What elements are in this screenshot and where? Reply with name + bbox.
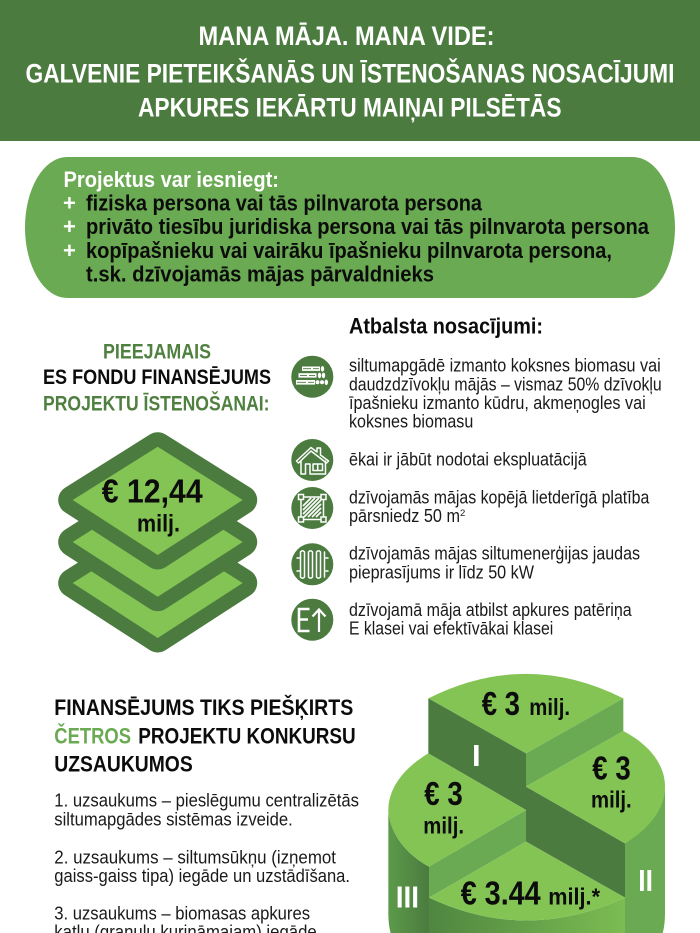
applicants list: t.sk. dzīvojamās mājas pārvaldnieks [86, 262, 434, 287]
amount labels: € 3 [424, 775, 463, 812]
total amount [102, 473, 203, 538]
text: list of calls: siltumapgādes sistēmas izveide. [54, 810, 293, 830]
slice I side faces [428, 698, 623, 810]
icon: floor area [291, 487, 333, 529]
text: list of calls [54, 791, 359, 933]
heading: available EU funding: PIEEJAMAIS [103, 341, 211, 364]
text: list of calls: 2. uzsaukums – siltumsūkņu (izņemot [54, 847, 336, 867]
text: energy class condition: dzīvojamā māja atbilst apkures patēriņa [349, 600, 633, 620]
applicants list: + [63, 238, 76, 263]
text: heating power condition [349, 544, 640, 582]
heading: four project calls: UZSAUKUMOS [54, 752, 193, 777]
applicants list: fiziska persona vai tās pilnvarota persona [86, 190, 483, 216]
title: MANA MĀJA. MANA VIDE: [198, 21, 494, 51]
chart: funding split cylinder [388, 674, 665, 933]
slice IV top [429, 842, 625, 920]
heading: four project calls: ČETROS [54, 723, 131, 748]
text: list of calls: 3. uzsaukums – biomasas apkures [54, 903, 310, 923]
text: floor area condition [349, 487, 650, 526]
slice III outer side [388, 810, 429, 933]
amount labels: milj.* [548, 883, 601, 909]
amount labels: milj. [529, 694, 570, 720]
text: heating power condition: dzīvojamās mājas siltumenerģijas jaudas [349, 544, 640, 564]
icon: stacked layers with total funding [73, 447, 243, 638]
applicants heading: Projektus var iesniegt: [64, 167, 279, 192]
slice II side [625, 787, 665, 933]
slice III inner side [429, 810, 526, 898]
text: biomass condition: koksnes biomasu [349, 412, 473, 432]
panel: who can apply [25, 157, 675, 298]
amount labels [423, 685, 632, 911]
heading: support conditions: Atbalsta nosacījumi: [349, 313, 543, 338]
text: list of calls: 1. uzsaukums – pieslēgumu centralizētās [54, 791, 359, 811]
slice III top [388, 753, 526, 867]
amount labels: € 3.44 [461, 874, 541, 911]
roman numerals: I [472, 738, 481, 773]
total amount: milj. [137, 511, 180, 538]
title [26, 21, 674, 123]
heading: four project calls: FINANSĒJUMS TIKS PIEŠĶIRTS [54, 695, 353, 720]
total amount: € 12,44 [102, 473, 203, 510]
text: floor area condition: 2 [460, 508, 465, 519]
slice IV side [429, 898, 625, 933]
heading: four project calls [54, 695, 356, 777]
amount labels: milj. [591, 786, 632, 812]
text: floor area condition: pārsniedz 50 m [349, 506, 460, 526]
slice II top [526, 731, 665, 843]
text: building commissioned: ēkai ir jābūt nodotai ekspluatācijā [349, 449, 588, 469]
applicants list: + [63, 214, 76, 239]
text: biomass condition [349, 356, 662, 432]
icon: house [291, 439, 333, 481]
text: floor area condition: dzīvojamās mājas kopējā lietderīgā platība [349, 487, 650, 507]
text: heating power condition: pieprasījums ir līdz 50 kW [349, 562, 534, 582]
text: biomass condition: īpašnieku izmanto kūdru, akmeņogles vai [349, 393, 646, 413]
applicants list: + [63, 190, 76, 216]
text: energy class condition [349, 600, 633, 638]
title: APKURES IEKĀRTU MAIŅAI PILSĒTĀS [138, 93, 562, 123]
roman numerals: II [638, 863, 653, 898]
applicants list [63, 190, 650, 287]
amount labels: milj. [423, 812, 464, 838]
text: energy class condition: E klasei vai efektīvākai klasei [349, 618, 553, 638]
amount labels: € 3 [592, 749, 631, 786]
roman numerals [396, 738, 653, 915]
text: biomass condition: siltumapgādē izmanto koksnes biomasu vai [349, 356, 661, 376]
amount labels: € 3 [482, 685, 520, 722]
slice I top [428, 674, 623, 753]
icon: energy class E with arrow [291, 599, 333, 641]
icon: wood logs [291, 356, 333, 398]
text: biomass condition: daudzdzīvokļu mājās – vismaz 50% dzīvokļu [349, 374, 662, 394]
heading: available EU funding: ES FONDU FINANSĒJUMS [43, 366, 271, 389]
heading: available EU funding [43, 341, 271, 416]
heading: available EU funding: PROJEKTU ĪSTENOŠANAI: [43, 392, 270, 416]
roman numerals: III [396, 880, 419, 915]
header band [0, 0, 700, 141]
icon: radiator [291, 543, 333, 585]
applicants list: kopīpašnieku vai vairāku īpašnieku pilnvarota persona, [86, 238, 612, 263]
heading: four project calls: PROJEKTU KONKURSU [138, 723, 356, 748]
text: list of calls: gaiss-gaiss tipa) iegāde un uzstādīšana. [54, 866, 350, 886]
applicants list: privāto tiesību juridiska persona vai tās pilnvarota persona [86, 214, 650, 239]
centre dark band [526, 787, 625, 898]
